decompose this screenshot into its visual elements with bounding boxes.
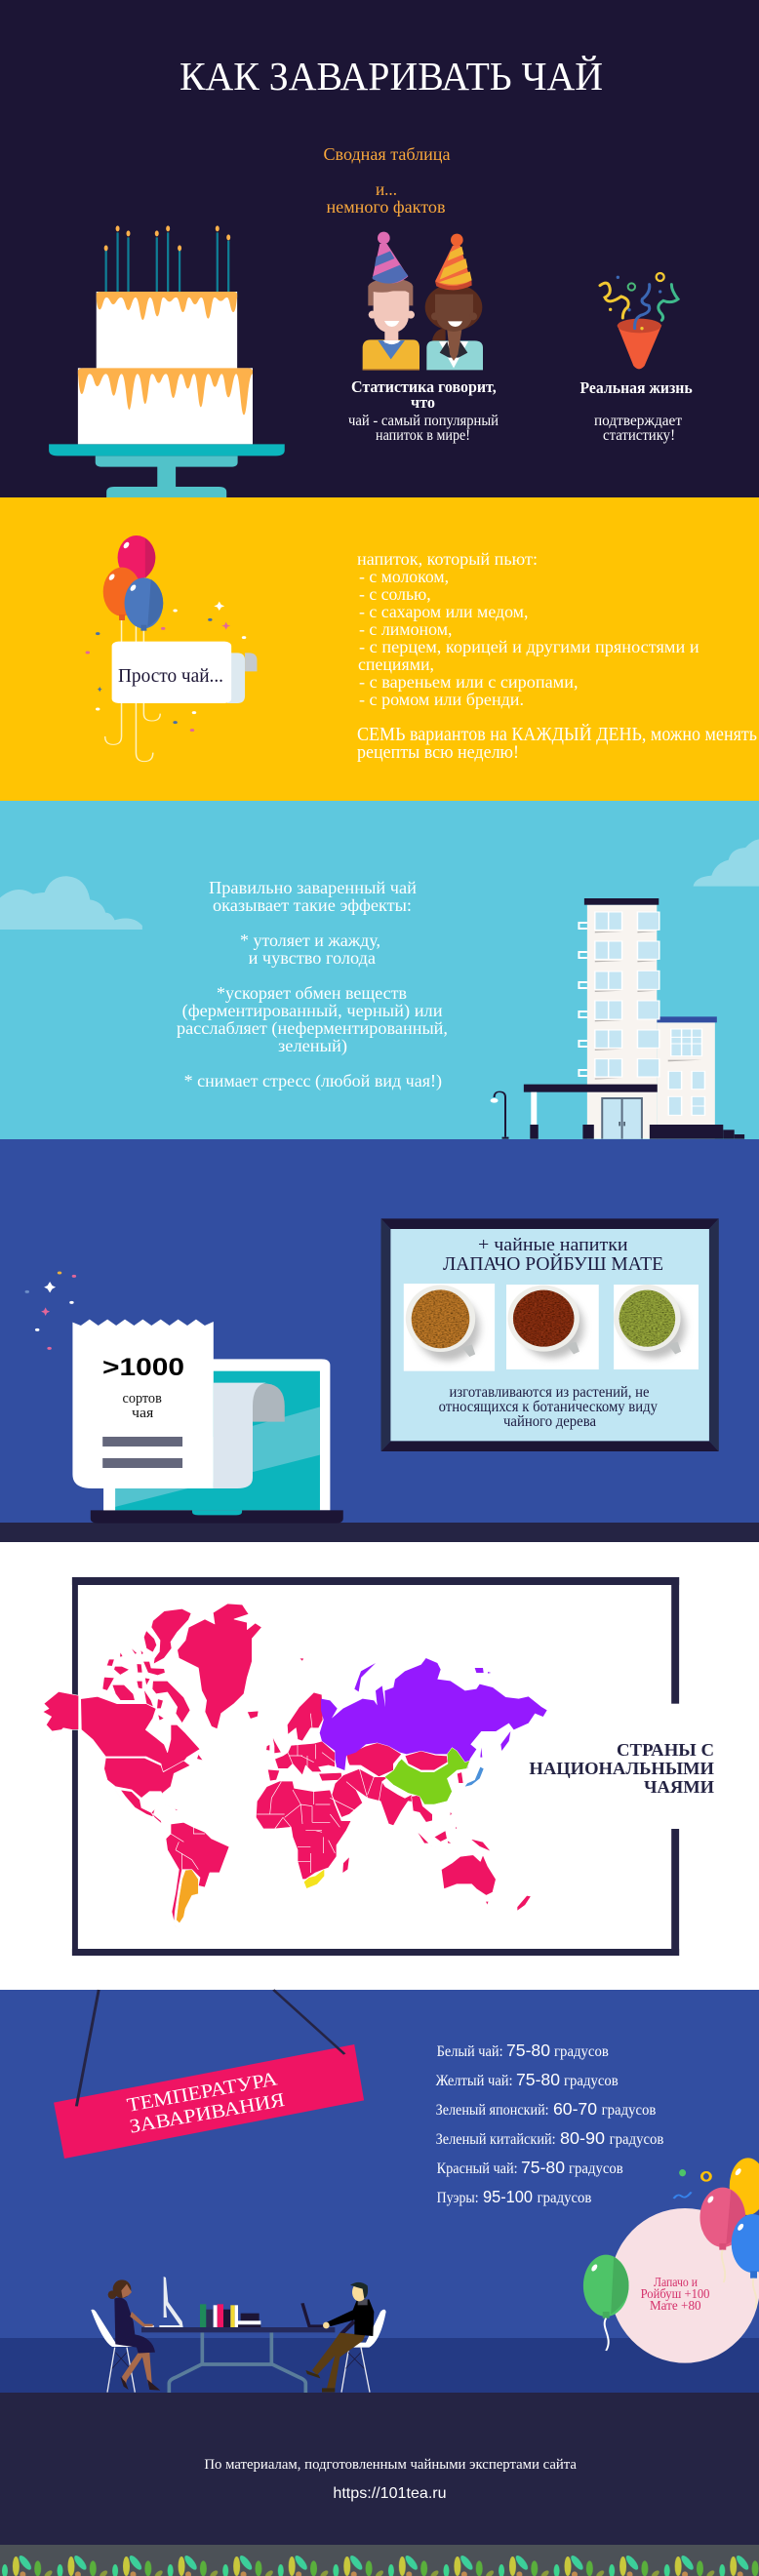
text: temperatures: градусов bbox=[610, 2131, 664, 2148]
map label: НАЦИОНАЛЬНЫМИ bbox=[529, 1759, 714, 1778]
subtitle: немного фактов bbox=[326, 197, 445, 217]
text: drink list: напиток, который пьют: bbox=[357, 549, 538, 569]
text: drink list bbox=[357, 549, 757, 763]
text: temperatures: 75-80 bbox=[516, 2070, 560, 2089]
desk with books bbox=[141, 2277, 335, 2393]
panel: footer bbox=[0, 2393, 759, 2576]
map label: ЧАЯМИ bbox=[644, 1777, 714, 1797]
person: man at desk bbox=[305, 2282, 386, 2393]
text: drink list: рецепты всю неделю! bbox=[357, 743, 519, 763]
world map bbox=[43, 1604, 547, 1930]
illustration: people at desk bbox=[91, 2277, 386, 2393]
map label: СТРАНЫ С bbox=[617, 1740, 714, 1760]
frame heading bbox=[443, 1235, 663, 1275]
subtitle: Сводная таблица bbox=[324, 144, 451, 164]
panel: effects bbox=[0, 801, 759, 1139]
text: drink list: - с солью, bbox=[359, 584, 431, 604]
map label bbox=[529, 1740, 714, 1797]
panel: intro bbox=[0, 0, 759, 497]
text: drink list: - с перцем, корицей и другими пряностями и bbox=[359, 637, 699, 656]
icon: cake bbox=[49, 225, 285, 497]
text: real life: Реальная жизнь bbox=[579, 378, 693, 397]
title: КАК ЗАВАРИВАТЬ ЧАЙ bbox=[180, 54, 603, 99]
frame caption: изготавливаются из растений, не bbox=[449, 1384, 650, 1401]
icon: building bbox=[524, 898, 744, 1139]
subtitle bbox=[324, 144, 451, 217]
text: real life: статистику! bbox=[603, 427, 675, 444]
source link: https://101tea.ru bbox=[333, 2485, 447, 2502]
text: statistics: чай - самый популярный bbox=[348, 413, 499, 429]
text: temperatures: градусов bbox=[569, 2160, 623, 2177]
frame caption: относящихся к ботаническому виду bbox=[439, 1399, 658, 1415]
frame caption bbox=[439, 1384, 658, 1430]
circle text: Ройбуш +100 bbox=[641, 2286, 710, 2301]
text: effects: *ускоряет обмен веществ bbox=[217, 983, 407, 1003]
text: temperatures: Пуэры: bbox=[437, 2190, 479, 2206]
receipt text: сортов bbox=[123, 1391, 162, 1407]
text: real life bbox=[579, 378, 693, 444]
image: lapacho cup bbox=[404, 1284, 495, 1371]
text: temperatures: 80-90 bbox=[560, 2128, 605, 2148]
frame heading: ЛАПАЧО РОЙБУШ МАТЕ bbox=[443, 1252, 663, 1275]
text: statistics: что bbox=[411, 393, 435, 412]
source text: По материалам, подготовленным чайными экспертами сайта bbox=[204, 2457, 577, 2473]
panel: tea drinks frame bbox=[380, 1218, 719, 1451]
text: drink list: - с ромом или бренди. bbox=[359, 690, 524, 709]
text: temperatures: градусов bbox=[602, 2102, 657, 2119]
text: effects: * снимает стресс (любой вид чая!) bbox=[184, 1071, 442, 1091]
hanging sign: ТЕМПЕРАТУРА bbox=[125, 2068, 279, 2117]
illustration: circle with balloons bbox=[583, 2158, 759, 2363]
text: real life: подтверждает bbox=[594, 413, 682, 429]
icon: street lamp bbox=[491, 1091, 508, 1139]
map: Eurasia, Africa and Oceania bbox=[256, 1658, 547, 1911]
text: drink list: - с вареньем или с сиропами, bbox=[359, 672, 578, 692]
text: temperatures bbox=[436, 2041, 664, 2206]
text: temperatures: Желтый чай: bbox=[436, 2073, 513, 2089]
receipt text: чая bbox=[132, 1406, 153, 1421]
text: drink list: - с лимоном, bbox=[359, 619, 453, 639]
person: man bbox=[363, 232, 419, 371]
circle text: Мате +80 bbox=[650, 2298, 701, 2313]
text: temperatures: 95-100 bbox=[483, 2187, 533, 2206]
subtitle: и... bbox=[376, 179, 397, 199]
banner text: Просто чай... bbox=[118, 665, 223, 687]
text: statistics: Статистика говорит, bbox=[351, 377, 497, 396]
text: drink list: - с молоком, bbox=[359, 567, 449, 586]
icon: two people in party hats bbox=[363, 232, 483, 371]
text: temperatures: Красный чай: bbox=[437, 2160, 518, 2177]
receipt text bbox=[102, 1354, 184, 1421]
hanging sign: ЗАВАРИВАНИЯ bbox=[128, 2089, 286, 2138]
image: rooibos cup bbox=[506, 1285, 599, 1369]
text: temperatures: Зеленый японский: bbox=[436, 2102, 549, 2119]
text: effects: (ферментированный, черный) или bbox=[182, 1001, 443, 1021]
text: effects: зеленый) bbox=[278, 1036, 347, 1056]
text: effects: Правильно заваренный чай bbox=[209, 878, 417, 897]
text: effects: оказывает такие эффекты: bbox=[213, 895, 412, 915]
text: effects: расслабляет (неферментированный, bbox=[177, 1018, 448, 1039]
text: temperatures: градусов bbox=[538, 2190, 592, 2206]
circle text bbox=[641, 2275, 710, 2313]
icon: party popper bbox=[600, 273, 678, 369]
icon: laptop with receipt bbox=[25, 1271, 343, 1524]
frame heading: + чайные напитки bbox=[478, 1235, 628, 1255]
text: temperatures: Зеленый китайский: bbox=[436, 2131, 556, 2148]
text: drink list: - с сахаром или медом, bbox=[359, 602, 528, 621]
leaf pattern strip bbox=[0, 2545, 759, 2576]
frame caption: чайного дерева bbox=[503, 1413, 596, 1430]
icon: balloons with banner bbox=[86, 535, 257, 762]
map: Americas and Greenland bbox=[43, 1604, 261, 1930]
receipt text: >1000 bbox=[102, 1354, 184, 1381]
circle text: Лапачо и bbox=[654, 2275, 698, 2289]
panel: varieties bbox=[0, 1139, 759, 1542]
person: woman bbox=[425, 234, 483, 370]
panel: world map bbox=[0, 1542, 759, 1990]
text: temperatures: 60-70 bbox=[553, 2099, 597, 2119]
text: statistics: напиток в мире! bbox=[376, 427, 470, 444]
text: drink list: специями, bbox=[358, 654, 434, 674]
icon: clouds bbox=[0, 839, 759, 930]
image: mate cup bbox=[614, 1285, 699, 1369]
text: temperatures: градусов bbox=[554, 2043, 609, 2060]
person: woman at desk bbox=[91, 2279, 160, 2393]
text: statistics bbox=[348, 377, 499, 444]
text: effects: и чувство голода bbox=[249, 948, 376, 968]
text: effects bbox=[177, 878, 448, 1091]
panel: just tea bbox=[0, 497, 759, 801]
hanging sign bbox=[54, 1990, 364, 2159]
text: temperatures: 75-80 bbox=[521, 2158, 565, 2177]
map frame bbox=[72, 1577, 679, 1956]
text: effects: * утоляет и жажду, bbox=[240, 931, 380, 950]
text: temperatures: градусов bbox=[564, 2073, 619, 2089]
panel: brewing temperature bbox=[0, 1990, 759, 2393]
text: temperatures: Белый чай: bbox=[437, 2043, 503, 2060]
text: temperatures: 75-80 bbox=[506, 2041, 550, 2060]
